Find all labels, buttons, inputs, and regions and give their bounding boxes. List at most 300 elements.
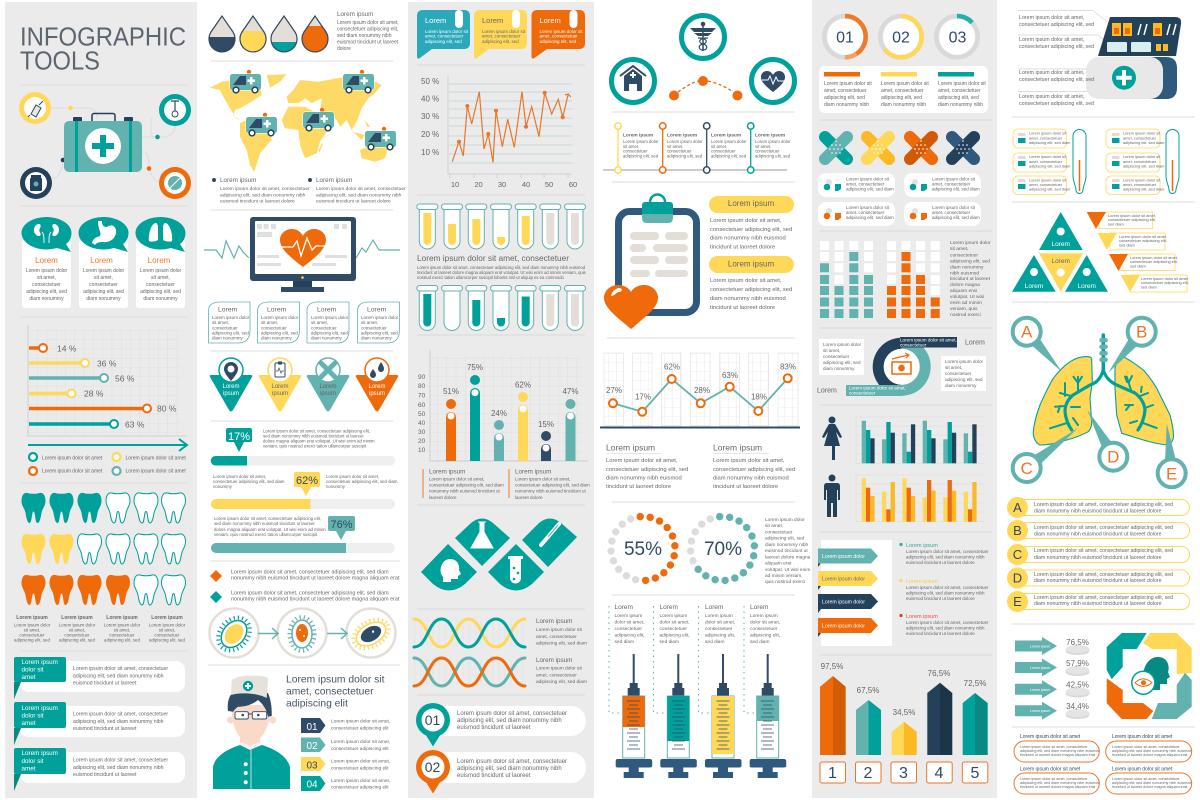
panel: money donut: sit amet,	[945, 365, 962, 370]
bubble orange: amet, consectetuer	[540, 34, 578, 38]
text block: donut note: sit amet,	[765, 523, 783, 529]
text block: tooth captions: Lorem ipsum	[16, 615, 48, 621]
panel: thermometers: amet, consectetuer	[1123, 182, 1157, 187]
illustration: kit	[1086, 17, 1181, 99]
panel: diamond bullet text: Lorem ipsum dolor sit amet, consectetuer adipiscing elit, sed diam	[231, 570, 389, 576]
panel: teeth pictogram	[14, 493, 186, 642]
text block: tube caption	[417, 253, 586, 280]
card: kidneys: Lorem ipsum dolor	[26, 268, 68, 274]
item E: Lorem ipsum dolor sit amet, consectetuer adipiscing elit, sed	[1034, 595, 1173, 601]
donut 70%: 70%	[704, 539, 742, 560]
text block: chart notes: diam nonummy nibh euismod	[606, 476, 682, 482]
panel: leaf text cards: adipiscing elit, sed	[261, 330, 298, 336]
card: kidneys: Lorem	[35, 256, 58, 265]
text block: square bars note: consectetuer	[950, 252, 978, 258]
ring 01: 01	[836, 30, 854, 46]
item A: diam nonummy nibh euismod tincidunt ut laoreet dolore	[1034, 508, 1162, 514]
panel: leaf text cards: Lorem ipsum dolor	[261, 315, 299, 320]
note 3: Lorem ipsum dolor sit amet, consectetuer	[1020, 777, 1088, 781]
text block: chart notes: laoreet dolore	[429, 495, 457, 500]
pill 02: adipiscing elit, sed diam nonummy nibh	[457, 766, 562, 772]
text block: donut note: quis nostrud exerci	[765, 579, 805, 585]
legend red: euismod tincidunt ut laoreet dolore	[906, 631, 975, 636]
panel: leaf text cards: sit amet,	[261, 320, 278, 325]
text block: map captions: Lorem ipsum dolor sit amet, consectetuer	[220, 186, 310, 192]
panel: vertical timeline: Lorem ipsum dolor	[623, 139, 659, 144]
item A: Lorem ipsum dolor sit amet, consectetuer adipiscing elit, sed	[1034, 502, 1173, 508]
callout row 1: Lorem ipsum dolor sit amet, consectetuer	[73, 666, 168, 672]
bubble blue: amet, consectetuer	[425, 34, 464, 38]
icon: ambulance	[364, 127, 396, 151]
text block: tooth captions: adipiscing elit, sed	[149, 638, 185, 642]
icon: test tube	[488, 544, 544, 590]
title: TOOLS	[20, 48, 100, 76]
text block: map captions: Lorem ipsum	[220, 177, 256, 184]
pin teal: ipsum	[223, 391, 239, 397]
panel: leaf text cards: diam nonummy	[212, 336, 244, 340]
chart: horizontal progress bars: 80 %	[157, 404, 177, 414]
slider 62%: nonummy	[326, 484, 346, 489]
pin teal: Lorem	[222, 384, 240, 390]
panel: test tubes yellow	[417, 204, 586, 249]
donut 70%	[688, 514, 757, 583]
list item 01: 01	[306, 722, 318, 733]
text card: adipiscing elit, sed	[881, 95, 922, 101]
chart: square bars orange	[887, 241, 940, 318]
panel: leaf text cards: consectetuer	[212, 326, 238, 330]
panel: leaf text cards: diam nonummy	[261, 336, 293, 340]
panel: gender bar charts	[822, 415, 984, 522]
panel: money donut: consectetuer	[849, 390, 876, 396]
bubble orange	[532, 10, 585, 59]
syringe 1: dolor sit amet,	[614, 620, 645, 626]
chart: line chart: 20 %	[421, 130, 439, 139]
list item 03	[301, 757, 390, 772]
panel: thermometers: amet, consectetuer	[1123, 159, 1157, 164]
row 42,5%: 42,5%	[1066, 680, 1089, 690]
panel: vertical timeline: consectetuer	[755, 148, 780, 154]
icon: bandage navy	[952, 137, 974, 159]
panel: leaf text cards: Lorem	[218, 306, 238, 314]
block: lorem 1: consectetuer adipiscing elit, sed	[710, 227, 792, 233]
panel: diamond bullet text: nonummy nibh euismod tincidunt ut laoreet dolore magna aliquam erat	[231, 596, 400, 602]
panel: money donut: Lorem	[965, 340, 985, 346]
text block: tooth captions: sit amet,	[69, 628, 85, 632]
chart: dotted donuts	[608, 514, 757, 583]
callout row 3	[14, 748, 185, 791]
column 4: 4	[935, 765, 944, 782]
pin orange: ipsum	[369, 391, 385, 397]
text block: map captions	[212, 177, 406, 204]
syringe 2: dolor sit amet,	[660, 620, 690, 626]
card teal left: amet, consectetuer	[846, 182, 885, 186]
note 1: Lorem ipsum dolor sit amet	[1020, 734, 1081, 740]
callout row 3: Lorem ipsum	[22, 750, 58, 757]
block: lorem 1: diam nonummy nibh euismod	[710, 236, 786, 242]
item C: C	[1013, 547, 1022, 562]
panel: leaf text cards: consectetuer	[311, 326, 337, 330]
text block: kit notes: consectetuer adipiscing elit, sed	[1019, 22, 1094, 28]
note 4: Lorem ipsum dolor sit amet, consectetuer	[1112, 777, 1180, 781]
bar 47%	[562, 387, 579, 461]
text block: tooth captions	[14, 615, 186, 642]
text block: chart notes: Lorem ipsum dolor sit amet,	[713, 458, 785, 464]
text block: tooth captions: Lorem ipsum	[61, 615, 93, 621]
pill 01: euismod tincidunt ut laoreet	[457, 725, 531, 731]
callout 3: sed diam	[1130, 264, 1146, 268]
panel: vertical timeline: sit amet,	[711, 144, 727, 149]
legend teal: Lorem ipsum	[906, 543, 938, 549]
chart: column chart: 40	[418, 420, 426, 427]
card: lungs: consectetuer	[146, 282, 175, 288]
icon: germ 2	[290, 617, 314, 651]
callout row 2: euismod tincidunt ut laoreet	[73, 726, 137, 732]
callout row 1	[14, 657, 185, 699]
card orange left: amet, consectetuer	[846, 210, 885, 215]
ring 02: 02	[892, 30, 910, 46]
card: kidneys: adipiscing elit, sed	[26, 289, 67, 295]
panel: healthcare icon badges	[612, 16, 794, 102]
pill 01: 01	[425, 712, 440, 728]
panel: vertical timeline: consectetuer	[667, 148, 692, 154]
text block: chart notes: Lorem ipsum	[713, 442, 762, 452]
panel: leaf text cards: sit amet,	[212, 320, 229, 325]
chart: line chart: 30	[498, 180, 506, 189]
panel: thermometers: Lorem ipsum dolor sit	[1029, 178, 1067, 182]
chart: progress sliders	[211, 428, 398, 553]
chart: percentage line over column grids: 17%	[635, 392, 651, 402]
icon: stethoscope badge	[159, 94, 191, 126]
pill 01: adipiscing elit, sed diam nonummy nibh	[457, 718, 562, 724]
panel: leaf text cards: Lorem	[267, 306, 287, 314]
text block: kit notes: consectetuer adipiscing elit, sed	[1019, 77, 1094, 83]
item B: B	[1013, 523, 1022, 538]
text block: kit notes: Lorem ipsum dolor sit amet,	[1019, 37, 1084, 43]
card: kidneys: diam nonummy	[29, 296, 64, 302]
bar 15%	[538, 420, 554, 461]
card orange right: Lorem ipsum dolor sit	[932, 205, 976, 210]
card: lungs	[136, 217, 186, 308]
panel: leaf text cards: sit amet,	[361, 320, 378, 325]
text block: Lorem ipsum	[337, 11, 373, 18]
panel: level drops	[208, 12, 398, 52]
pin light teal: Lorem	[319, 384, 337, 390]
column 1: 97,5%	[821, 662, 843, 671]
card orange left: Lorem ipsum dolor sit	[846, 205, 890, 210]
item A	[1007, 497, 1190, 518]
tag yellow	[818, 571, 878, 590]
panel: leaf text cards: diam nonummy	[361, 336, 393, 340]
card orange left	[818, 202, 895, 226]
chart: line chart: 20	[474, 180, 483, 189]
item D: D	[1013, 570, 1022, 586]
slider 17%	[211, 428, 395, 466]
bubble blue	[417, 10, 470, 59]
pill 02	[416, 750, 586, 794]
pin orange: Lorem	[368, 384, 386, 390]
legend yellow: euismod tincidunt ut laoreet dolore	[906, 596, 975, 601]
icon: bandage yellow	[867, 137, 889, 159]
panel: leaf text cards: Lorem	[367, 306, 387, 314]
slider 62%: nonummy	[213, 484, 233, 489]
card: stomach: diam nonummy	[86, 296, 121, 302]
text block: tooth captions: Lorem ipsum dolor	[59, 622, 96, 628]
panel: vertical timeline: Lorem ipsum	[623, 132, 653, 138]
donut 55%	[608, 514, 678, 583]
panel: leaf text cards: adipiscing elit, sed	[311, 330, 348, 336]
panel: thermometers: Lorem ipsum dolor sit	[1029, 154, 1067, 159]
note 1: Lorem ipsum dolor sit amet, consectetuer	[1020, 745, 1088, 749]
card orange right: adipiscing elit, sed diam	[932, 215, 980, 220]
icon: money	[884, 349, 920, 385]
tag navy: Lorem ipsum dolor	[822, 600, 865, 606]
card teal left: Lorem ipsum dolor sit	[846, 176, 890, 182]
panel: cycle arrows with head	[1107, 633, 1192, 719]
panel: syringes	[609, 604, 786, 778]
row 42,5%	[1015, 680, 1090, 698]
callout 3: consectetuer adipiscing elit,	[1130, 259, 1178, 264]
callout row 1: adipiscing elit, sed diam nonummy nibh	[73, 674, 164, 680]
legend: Lorem ipsum dolor sit amet	[126, 468, 186, 474]
item E: diam nonummy nibh euismod tincidunt ut laoreet dolore	[1034, 601, 1162, 607]
icon: thermometer	[1166, 130, 1179, 194]
callout 2: Lorem ipsum dolor sit amet,	[1119, 234, 1167, 239]
syringe 2	[660, 604, 697, 778]
icon: ambulance	[302, 108, 334, 132]
triangle top: Lorem	[1051, 241, 1070, 248]
panel: vertical timeline: sit amet,	[667, 144, 683, 149]
panel: vertical timeline	[603, 123, 791, 173]
card: lungs: diam nonummy	[143, 296, 178, 302]
text block: chart notes: laoreet dolore	[515, 495, 543, 500]
column 3: 34,5%	[893, 708, 915, 717]
callout 1: Lorem ipsum dolor sit amet,	[1108, 213, 1156, 218]
tag light teal	[818, 548, 878, 567]
pin teal	[210, 358, 252, 412]
bar 15%: 15%	[538, 420, 554, 429]
block: lorem 1: Lorem ipsum	[728, 199, 774, 208]
text block: Lorem ipsum	[536, 618, 572, 625]
block: lorem 1: tincidunt ut laoreet dolore	[710, 244, 775, 250]
syringe 4: dolor sit amet,	[750, 620, 780, 626]
panel: vertical timeline: Lorem ipsum	[755, 132, 785, 138]
text block: adipiscing elit, sed diam	[536, 640, 587, 646]
text block: tooth captions: consectetuer	[64, 632, 90, 638]
chart: column chart: 80	[418, 383, 426, 390]
card orange right	[904, 202, 981, 226]
card: stomach: sit amet,	[94, 275, 113, 281]
chart: horizontal progress bars	[28, 325, 187, 451]
panel: germ progression	[210, 608, 396, 658]
syringe 3: consectetuer	[705, 626, 733, 632]
card: stomach: Lorem ipsum dolor	[83, 268, 125, 274]
text block: donut note: volutpat. Ut wisi enim	[765, 567, 810, 573]
note 2: tincidunt ut laoreet dolore magna aliquam erat	[1112, 753, 1187, 757]
bar 24%: 24%	[491, 409, 507, 418]
text block: square bars note: aliquam erat	[950, 288, 978, 294]
row 34,4%: 34,4%	[1066, 702, 1089, 711]
text block: kit notes: consectetuer adipiscing elit, sed	[1019, 44, 1094, 50]
item B: diam nonummy nibh euismod tincidunt ut laoreet dolore	[1034, 532, 1162, 538]
slider 17%: 17%	[228, 431, 250, 443]
callout row 3: Lorem ipsum dolor sit amet, consectetuer	[73, 758, 168, 764]
chart: percentage line over column grids	[600, 353, 800, 428]
bar 62%: 62%	[515, 380, 531, 390]
syringe 3: Lorem	[705, 604, 723, 611]
list item 04	[301, 776, 390, 791]
chart: horizontal progress bars: 28 %	[84, 388, 104, 398]
legend	[29, 453, 186, 475]
list item 03: 03	[306, 760, 318, 772]
slider 76%: veniam, quis nostrud exerci tation ullamcorper suscipit	[214, 532, 318, 537]
row 57,9%: Lorem ipsum	[1030, 666, 1050, 670]
panel: money donut: sit amet,	[823, 348, 840, 353]
legend yellow: Lorem ipsum	[906, 579, 938, 585]
note 4: tincidunt ut laoreet dolore magna aliquam erat	[1112, 785, 1187, 789]
callout 2	[1098, 233, 1167, 250]
text block: tooth captions: Lorem ipsum dolor	[104, 622, 141, 628]
chart: line chart: 40 %	[421, 94, 439, 104]
list item 04: Lorem ipsum dolor sit amet,	[331, 778, 390, 784]
text block: chart notes	[606, 442, 795, 490]
panel: leaf text cards: adipiscing elit, sed	[212, 330, 249, 336]
block: lorem 2: diam nonummy nibh euismod	[710, 296, 786, 302]
bar 75%	[467, 363, 483, 461]
panel: diamond bullet text: nonummy nibh euismod tincidunt ut laoreet dolore magna aliquam erat	[231, 576, 400, 582]
===== COLUMN 3 =====	[417, 65, 585, 695]
icon: heart	[752, 60, 794, 102]
text card: diam nonummy nibh	[881, 102, 926, 108]
panel: vertical timeline: adipiscing elit, sed	[623, 154, 659, 158]
slider 62%: consectetuer adipiscing elit, sed diam	[213, 479, 285, 484]
callout A: A	[1021, 323, 1033, 342]
syringe 3: Lorem ipsum	[705, 613, 733, 619]
list item 03: consectetuer adipiscing elit	[331, 766, 389, 772]
callout D	[1087, 410, 1127, 471]
heading: amet, consectetuer	[286, 686, 374, 698]
row 34,4%	[1015, 702, 1090, 720]
legend yellow	[899, 579, 989, 601]
text block: square bars note: nibh euismod	[950, 270, 979, 276]
chart: line chart: 40	[522, 180, 530, 189]
slider 62%: Lorem ipsum dolor sit amet,	[213, 474, 266, 479]
drop teal	[270, 15, 298, 52]
panel: money donut: Lorem	[817, 388, 837, 394]
panel: thermometers: amet, consectetuer	[1029, 182, 1063, 187]
bubble blue: adipiscing elit, sed	[425, 39, 462, 44]
callout row 3: euismod tincidunt ut laoreet	[73, 772, 137, 778]
callout E: E	[1166, 464, 1177, 483]
icon: flask	[455, 518, 510, 566]
text block: kit notes: Lorem ipsum dolor sit amet,	[1019, 15, 1084, 21]
chart: column chart: 60	[418, 402, 426, 409]
callout D: D	[1107, 448, 1119, 467]
chart: column chart: 90	[418, 374, 426, 381]
card teal left	[818, 173, 895, 197]
arrow	[327, 628, 347, 639]
icon: ambulance	[246, 113, 278, 137]
card: stomach: Lorem	[90, 256, 113, 265]
text block: Lorem ipsum dolor sit	[536, 627, 583, 633]
text block	[536, 618, 587, 646]
panel: money donut: consectetuer	[945, 371, 972, 376]
note 1	[1014, 734, 1099, 762]
legend: Lorem ipsum dolor sit amet	[42, 468, 103, 474]
chart: column chart: 50	[418, 411, 426, 418]
note 4: adipiscing elit, sed diam nonummy nibh euismod	[1112, 781, 1191, 785]
text card: amet, consectetuer	[938, 88, 981, 94]
ring 03: 03	[949, 30, 966, 46]
panel: pill cards	[818, 173, 981, 226]
list item 02: Lorem ipsum dolor sit amet,	[331, 739, 390, 745]
list item 03: Lorem ipsum dolor sit amet,	[331, 758, 390, 764]
text block: map captions: adipiscing elit, sed diam nonummy nibh	[316, 192, 402, 198]
list item 01: Lorem ipsum dolor sit amet,	[331, 718, 390, 724]
card: kidneys	[22, 217, 72, 308]
syringe 2: consectetuer	[660, 626, 687, 632]
panel: money donut	[817, 337, 986, 396]
chart: group one	[856, 415, 984, 464]
legend: Lorem ipsum dolor sit amet	[42, 456, 103, 462]
text block: tooth captions: sit amet,	[159, 628, 175, 632]
syringe 1: Lorem	[614, 604, 633, 611]
syringe 4: adipiscing elit,	[750, 632, 780, 638]
panel: vertical timeline: Lorem ipsum	[711, 132, 741, 138]
text block: map captions: Lorem ipsum	[316, 177, 352, 184]
panel: diamond bullet text	[210, 570, 400, 603]
panel: thermometers: adipiscing elit, sed diam	[1029, 186, 1070, 192]
item B: Lorem ipsum dolor sit amet, consectetuer adipiscing elit, sed	[1034, 525, 1173, 531]
item D: Lorem ipsum dolor sit amet, consectetuer adipiscing elit, sed	[1034, 572, 1173, 578]
triangle middle: Lorem	[1051, 258, 1070, 265]
tag navy	[818, 594, 878, 613]
triangle middle	[1039, 253, 1083, 292]
text block	[536, 657, 587, 685]
chart: horizontal progress bars: 14 %	[57, 344, 77, 354]
pill 02: 02	[425, 759, 440, 775]
callout 4: sed diam	[1141, 284, 1157, 290]
row 76,5%: Lorem ipsum	[1030, 644, 1050, 648]
syringe 1	[614, 604, 652, 778]
icon: syringe badge	[19, 92, 51, 124]
card teal right: amet, consectetuer	[932, 182, 971, 186]
pill 02: Lorem ipsum dolor sit amet, consectetuer	[457, 759, 567, 765]
slider 76%: 76%	[330, 519, 353, 531]
slider 17%: veniam, quis nostrud exerci tation ullamcorper suscipit	[263, 444, 367, 448]
panel: leaf text cards: Lorem ipsum dolor	[212, 315, 250, 320]
icon: medical case	[64, 114, 142, 172]
panel: leaf text cards: Lorem ipsum dolor	[311, 315, 349, 320]
bubble orange: Lorem ipsum dolor sit	[540, 29, 583, 34]
chart: line chart: 60	[569, 180, 577, 189]
legend teal: euismod tincidunt ut laoreet dolore	[906, 560, 975, 565]
panel: first aid kit hub	[19, 92, 191, 199]
icon: caduceus	[682, 16, 724, 58]
text block: square bars note: veniam, quis	[950, 306, 978, 312]
callout row 2: adipiscing elit, sed diam nonummy nibh	[73, 719, 164, 725]
row 57,9%: 57,9%	[1066, 659, 1089, 668]
icon: bandage orange	[910, 137, 932, 159]
icon: head and eye	[1132, 657, 1170, 694]
bubble yellow	[474, 10, 527, 59]
panel: diamond bullet text: Lorem ipsum dolor sit amet, consectetuer adipiscing elit, sed diam	[231, 590, 389, 596]
slider 62%: consectetuer adipiscing elit, sed diam	[326, 479, 398, 484]
chart: percentage line over column grids: 27%	[606, 386, 622, 395]
panel: leaf text cards: diam nonummy	[311, 336, 343, 340]
panel: A to E list	[1007, 497, 1190, 612]
text block: square bars note: dolore magna	[950, 282, 980, 288]
text card: Lorem ipsum dolor sit	[938, 81, 986, 87]
